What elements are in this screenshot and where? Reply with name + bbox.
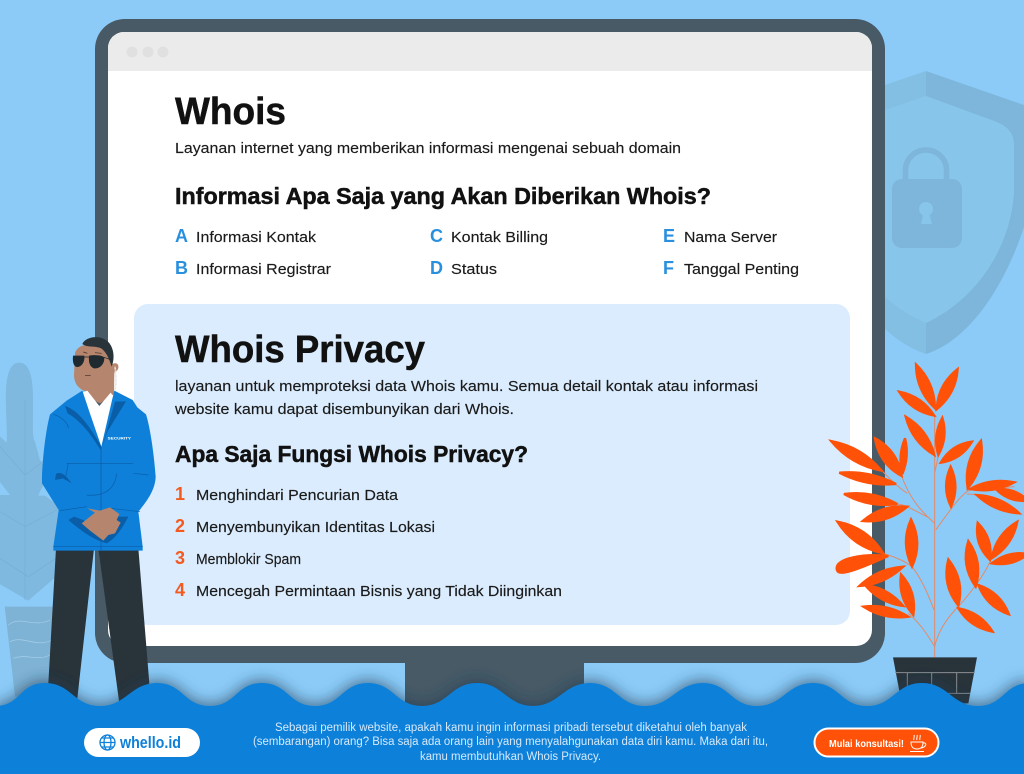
jacket xyxy=(42,391,156,551)
footer text: Sebagai pemilik website, apakah kamu ingin informasi pribadi tersebut diketahui oleh banyak xyxy=(275,722,747,734)
list: fungsi Whois Privacy: Mencegah Permintaan Bisnis yang Tidak Diinginkan xyxy=(196,583,562,600)
shirt xyxy=(82,391,114,447)
list: informasi Whois: Kontak Billing xyxy=(451,229,548,246)
hair xyxy=(82,337,114,367)
browser title bar xyxy=(108,32,872,71)
potted plant xyxy=(831,364,1024,703)
list: informasi Whois: Tanggal Penting xyxy=(684,261,799,278)
footer wave xyxy=(0,683,1024,774)
list: informasi Whois: A xyxy=(175,226,188,246)
list: informasi Whois: Informasi Registrar xyxy=(196,261,331,278)
list: fungsi Whois Privacy xyxy=(175,484,562,600)
window dots xyxy=(126,46,168,58)
sunglasses xyxy=(73,355,112,368)
list: informasi Whois: E xyxy=(663,226,675,246)
button: mulai konsultasi xyxy=(814,728,938,756)
list: fungsi Whois Privacy: Menghindari Pencurian Data xyxy=(196,487,399,504)
icon: background shield with padlock xyxy=(885,71,1024,354)
heading: fungsi Whois Privacy: Apa Saja Fungsi Whois Privacy? xyxy=(175,441,528,467)
monitor screen xyxy=(108,32,872,646)
list: fungsi Whois Privacy: 2 xyxy=(175,516,185,536)
list: informasi Whois xyxy=(175,226,799,278)
logo pill: whello.id xyxy=(84,728,200,757)
list: fungsi Whois Privacy: 1 xyxy=(175,484,185,504)
description: Whois: Layanan internet yang memberikan informasi mengenai sebuah domain xyxy=(175,140,681,157)
security guard illustration xyxy=(42,337,156,703)
plant pot xyxy=(893,657,977,703)
security label: SECURITY xyxy=(108,437,132,441)
list: fungsi Whois Privacy: 4 xyxy=(175,580,185,600)
footer text xyxy=(253,722,768,763)
list: fungsi Whois Privacy: 3 xyxy=(175,548,185,568)
list: informasi Whois: Informasi Kontak xyxy=(196,229,317,246)
panel: whois privacy background xyxy=(134,304,850,625)
heading: informasi Whois: Informasi Apa Saja yang Akan Diberikan Whois? xyxy=(175,183,711,209)
list: informasi Whois: Status xyxy=(451,261,497,278)
button: mulai konsultasi: Mulai konsultasi! xyxy=(829,738,904,750)
ghost plant in background xyxy=(0,363,60,697)
description: Whois Privacy: website kamu dapat disembunyikan dari Whois. xyxy=(174,401,514,418)
monitor frame xyxy=(95,19,885,663)
icon: globe xyxy=(100,735,115,750)
list: fungsi Whois Privacy: Menyembunyikan Identitas Lokasi xyxy=(196,519,435,536)
list: fungsi Whois Privacy: Memblokir Spam xyxy=(196,551,301,568)
head xyxy=(74,344,118,403)
description: Whois Privacy xyxy=(174,378,758,418)
leaves xyxy=(831,364,1024,632)
title: Whois: Whois xyxy=(175,91,286,133)
list: informasi Whois: C xyxy=(430,226,443,246)
monitor stand xyxy=(405,655,584,715)
list: informasi Whois: F xyxy=(663,258,674,278)
list: informasi Whois: B xyxy=(175,258,188,278)
hands xyxy=(82,507,121,541)
logo pill: whello.id: whello.id xyxy=(119,733,181,752)
icon: coffee cup xyxy=(910,735,926,752)
earpiece xyxy=(112,367,118,390)
list: informasi Whois: Nama Server xyxy=(684,229,777,246)
stems xyxy=(882,415,1014,657)
trousers xyxy=(48,548,149,703)
list: informasi Whois: D xyxy=(430,258,443,278)
title: Whois Privacy: Whois Privacy xyxy=(175,329,425,371)
footer text: (sembarangan) orang? Bisa saja ada orang lain yang menyalahgunakan data diri kamu. Maka dari itu, xyxy=(253,736,768,748)
footer text: kamu membutuhkan Whois Privacy. xyxy=(420,751,601,763)
description: Whois Privacy: layanan untuk memproteksi data Whois kamu. Semua detail kontak atau informasi xyxy=(175,378,758,395)
jacket shading xyxy=(55,401,128,543)
mouth xyxy=(83,352,102,376)
